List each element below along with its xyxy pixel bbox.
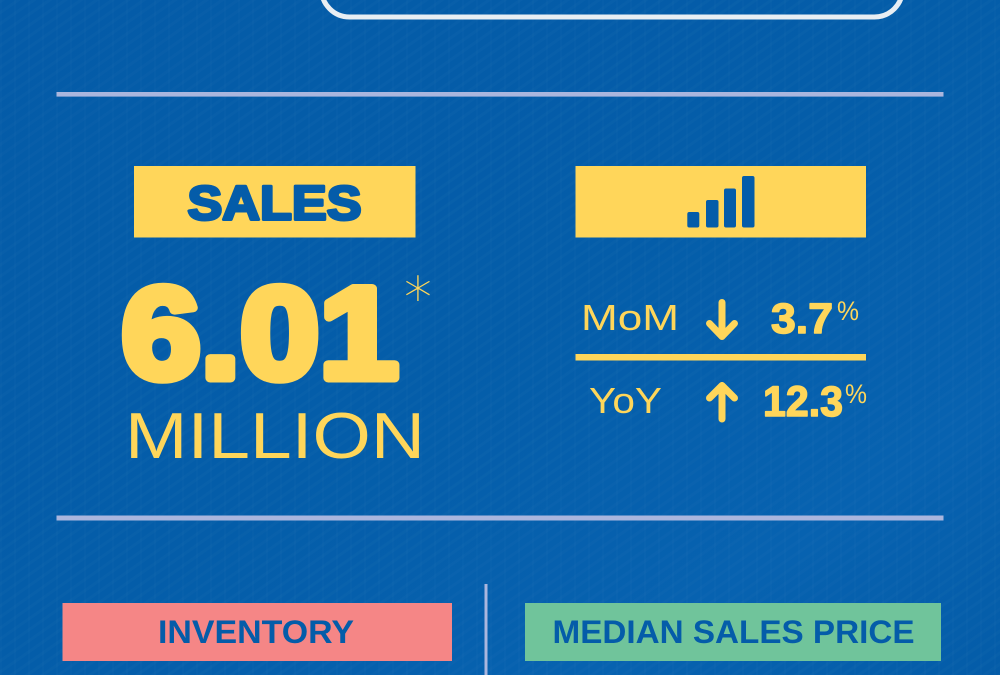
divider rule top bbox=[56, 92, 944, 97]
arrow up bbox=[710, 386, 734, 419]
panel: inventory bbox=[62, 603, 452, 661]
panel: sales bbox=[122, 166, 432, 472]
YoY row bbox=[589, 378, 867, 426]
panel: median sales price bbox=[525, 603, 941, 661]
asterisk: * bbox=[404, 266, 432, 331]
sales heading bbox=[134, 166, 416, 238]
YoY row: 12.3 bbox=[763, 378, 843, 426]
chart icon banner bbox=[576, 166, 866, 238]
vertical divider bbox=[484, 584, 488, 675]
MoM row: MoM bbox=[581, 297, 679, 338]
panel: inventory: INVENTORY bbox=[158, 614, 354, 650]
sales heading: SALES bbox=[188, 178, 362, 230]
MoM row bbox=[581, 295, 859, 343]
panel: median sales price: MEDIAN SALES PRICE bbox=[552, 614, 914, 650]
MoM row: 3.7 bbox=[771, 295, 833, 343]
million label: MILLION bbox=[125, 399, 425, 472]
top rounded frame bbox=[322, 0, 902, 17]
YoY row: % bbox=[845, 379, 867, 409]
MoM row: % bbox=[837, 296, 859, 326]
arrow down bbox=[710, 302, 734, 336]
sales figure: 6.01 bbox=[122, 260, 398, 406]
divider rule middle bbox=[56, 516, 944, 520]
rule between rows bbox=[576, 354, 866, 360]
YoY row: YoY bbox=[589, 380, 662, 421]
panel: change bbox=[576, 166, 867, 426]
